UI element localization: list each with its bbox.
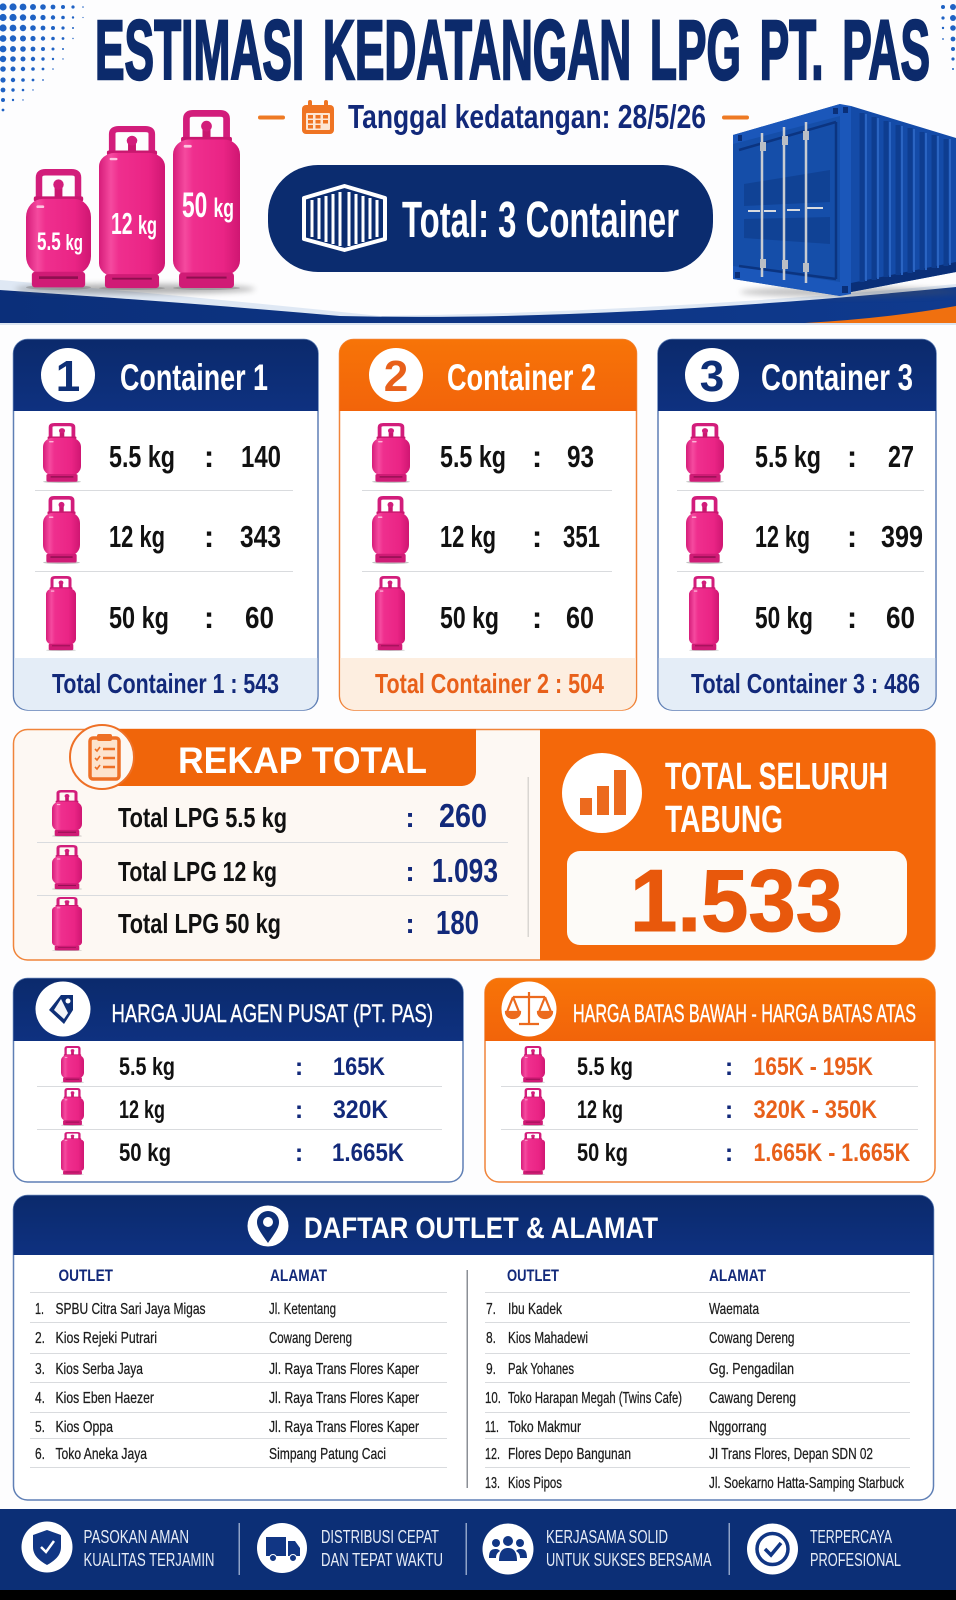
row: 12 kg	[43, 498, 281, 564]
row: 5.5 kg: 5.5 kg	[755, 439, 821, 474]
row: 5.5 kg: 5.5 kg	[440, 439, 506, 474]
row: 50 kg	[689, 577, 915, 651]
row: 5.5 kg	[43, 425, 281, 483]
total container 1: Total Container 1 : 543	[52, 668, 279, 699]
cylinder 12 kg	[99, 129, 165, 290]
row: 5.5 kg: :	[532, 439, 542, 474]
heading: harga batas	[485, 978, 935, 1041]
row: 5.5 kg: 140	[241, 439, 281, 474]
panel: container 2	[340, 340, 636, 710]
row: 5.5 kg: 165K	[333, 1053, 385, 1081]
feature: kerjasama solid: UNTUK SUKSES BERSAMA	[546, 1550, 712, 1570]
row: 12 kg: 12 kg	[440, 519, 496, 554]
table: outlets 7 to 13: 11.	[485, 1419, 499, 1436]
row: 5.5 kg: :	[295, 1053, 303, 1081]
feature: distribusi cepat	[257, 1523, 443, 1573]
row: 50 kg: 60	[566, 600, 594, 635]
row: total lpg 50 kg: Total LPG 50 kg	[118, 908, 281, 939]
heading: harga jual	[14, 978, 463, 1041]
row: 12 kg	[686, 498, 923, 564]
lpg cylinders hero	[15, 113, 255, 294]
row: 12 kg: 351	[563, 519, 600, 554]
total value	[567, 851, 907, 950]
total heading: TABUNG	[665, 799, 783, 841]
table: outlets 1 to 6: Kios Oppa	[56, 1419, 113, 1436]
icon: bar chart	[562, 753, 642, 833]
table: outlets 1 to 6: 6.	[35, 1446, 45, 1463]
table: outlets 7 to 13: 12.	[485, 1446, 500, 1463]
panel: harga batas	[485, 978, 935, 1182]
header: container 2	[340, 340, 636, 411]
cylinder 5.5 kg	[26, 172, 91, 290]
container illustration	[733, 104, 956, 297]
total value: 1.533	[630, 851, 843, 950]
heading: daftar outlet	[14, 1196, 934, 1255]
row: 12 kg: :	[204, 519, 214, 554]
table: outlets 1 to 6: Kios Rejeki Putrari	[56, 1330, 157, 1347]
panel: total seluruh tabung	[540, 729, 935, 960]
table: outlets 7 to 13: 8.	[486, 1330, 496, 1347]
table: outlets 1 to 6: ALAMAT	[270, 1266, 327, 1285]
row: 50 kg: :	[532, 600, 542, 635]
row: 5.5 kg: :	[204, 439, 214, 474]
feature: kerjasama solid	[482, 1524, 712, 1574]
row: 50 kg	[61, 1133, 404, 1175]
feature: pasokan aman: KUALITAS TERJAMIN	[84, 1550, 214, 1570]
feature: terpercaya	[747, 1524, 901, 1574]
feature: pasokan aman	[22, 1522, 214, 1572]
row: 50 kg: 1.665K	[332, 1139, 404, 1167]
row: 12 kg: :	[295, 1096, 303, 1124]
row: 5.5 kg	[521, 1047, 873, 1083]
table: outlets 7 to 13: JI Trans Flores, Depan SDN 02	[709, 1446, 873, 1463]
row: total lpg 5.5 kg: :	[405, 802, 415, 833]
rekap heading	[70, 725, 476, 789]
table: outlets 1 to 6: Jl. Raya Trans Flores Kaper	[269, 1390, 420, 1407]
row: 5.5 kg: 27	[888, 439, 914, 474]
header: container 2: 2	[384, 352, 408, 401]
table: outlets 7 to 13: 10.	[485, 1390, 501, 1407]
panel: container 3	[658, 340, 936, 710]
row: total lpg 50 kg	[52, 898, 479, 951]
row: 50 kg	[375, 577, 594, 651]
table: outlets 7 to 13: Kios Pipos	[508, 1475, 562, 1492]
table: outlets 7 to 13: Flores Depo Bangunan	[508, 1446, 631, 1463]
row: total lpg 12 kg: 1.093	[432, 852, 498, 889]
row: total lpg 5.5 kg	[52, 791, 487, 837]
row: 12 kg: :	[847, 519, 857, 554]
total container pill: Total: 3 Container	[402, 191, 679, 248]
footer band	[0, 1509, 956, 1600]
table: outlets 1 to 6: Kios Eben Haezer	[56, 1390, 155, 1407]
row: 5.5 kg: 165K - 195K	[754, 1053, 873, 1081]
table: outlets 1 to 6: Jl. Ketentang	[269, 1301, 336, 1318]
table: outlets 7 to 13: Toko Makmur	[508, 1419, 582, 1436]
row: 50 kg: 1.665K - 1.665K	[754, 1139, 910, 1167]
feature: terpercaya: TERPERCAYA	[810, 1527, 892, 1547]
table: outlets 1 to 6: 2.	[35, 1330, 45, 1347]
feature: distribusi cepat: DAN TEPAT WAKTU	[321, 1550, 443, 1570]
panel: harga jual agen pusat	[14, 978, 463, 1182]
table: outlets 1 to 6: OUTLET	[58, 1266, 113, 1285]
table: outlets 1 to 6: Toko Aneka Jaya	[56, 1446, 147, 1463]
table: outlets 1 to 6: 4.	[35, 1390, 45, 1407]
header: container 3: 3	[700, 352, 724, 401]
icon: clipboard	[90, 734, 119, 779]
cylinder 50 kg: 50 kg	[182, 186, 234, 225]
row: 5.5 kg: :	[725, 1053, 733, 1081]
header swoosh	[0, 280, 956, 325]
row: total lpg 12 kg: :	[405, 856, 415, 887]
row: 12 kg	[521, 1089, 877, 1126]
cylinder 50 kg	[173, 113, 240, 290]
row: 5.5 kg: 5.5 kg	[119, 1053, 175, 1081]
row: 12 kg: 12 kg	[119, 1096, 165, 1124]
row: 5.5 kg: 5.5 kg	[109, 439, 175, 474]
table: outlets 7 to 13: 9.	[486, 1361, 496, 1378]
rekap heading: REKAP TOTAL	[178, 740, 427, 781]
feature: terpercaya: PROFESIONAL	[810, 1550, 901, 1570]
row: 50 kg: :	[204, 600, 214, 635]
feature: distribusi cepat: DISTRIBUSI CEPAT	[321, 1527, 439, 1547]
halftone dots top left	[0, 3, 84, 111]
total container 2: Total Container 2 : 504	[375, 668, 604, 699]
table: outlets 1 to 6: Cowang Dereng	[269, 1330, 352, 1347]
row: 12 kg: 12 kg	[577, 1096, 623, 1124]
row: 5.5 kg	[686, 425, 914, 483]
table: outlets 7 to 13: Nggorrang	[709, 1419, 766, 1436]
table: outlets 7 to 13: Waemata	[709, 1301, 759, 1318]
cylinder 5.5 kg: 5.5 kg	[37, 228, 83, 256]
row: 12 kg	[61, 1089, 388, 1126]
row: total lpg 5.5 kg: 260	[439, 797, 487, 834]
row: total lpg 50 kg: 180	[436, 904, 479, 941]
row: 5.5 kg	[372, 425, 594, 483]
table: outlets 1 to 6: SPBU Citra Sari Jaya Migas	[56, 1301, 206, 1318]
cylinder 12 kg: 12 kg	[111, 206, 157, 241]
row: 12 kg: :	[532, 519, 542, 554]
row: 12 kg	[372, 498, 600, 564]
row: 12 kg: :	[725, 1096, 733, 1124]
row: 50 kg: :	[295, 1139, 303, 1167]
table: outlets 1 to 6	[35, 1266, 420, 1463]
panel: container 1	[14, 340, 318, 710]
row: 50 kg: :	[847, 600, 857, 635]
row: 5.5 kg: :	[847, 439, 857, 474]
row: 12 kg: 399	[881, 519, 923, 554]
row: 50 kg	[46, 577, 274, 651]
table: outlets 1 to 6: Simpang Patung Caci	[269, 1446, 386, 1463]
row: 50 kg: :	[725, 1139, 733, 1167]
header: container 1: 1	[56, 352, 80, 401]
row: 5.5 kg	[61, 1047, 385, 1083]
table: outlets 1 to 6: 3.	[35, 1361, 45, 1378]
header: container 2: Container 2	[447, 357, 596, 398]
row: 50 kg: 60	[245, 600, 274, 635]
total container 2	[340, 658, 636, 710]
row: 50 kg: 50 kg	[119, 1139, 171, 1167]
row: 50 kg: 50 kg	[109, 600, 169, 635]
total container 1	[14, 658, 317, 710]
row: 50 kg	[521, 1133, 910, 1175]
row: 12 kg: 12 kg	[109, 519, 165, 554]
row: total lpg 50 kg: :	[405, 908, 415, 939]
row: 12 kg: 343	[240, 519, 281, 554]
table: outlets 7 to 13: Cowang Dereng	[709, 1330, 794, 1347]
table: outlets 7 to 13: Kios Mahadewi	[508, 1330, 588, 1347]
table: outlets 7 to 13	[485, 1266, 905, 1492]
feature: kerjasama solid: KERJASAMA SOLID	[546, 1527, 668, 1547]
table: outlets 1 to 6: Jl. Raya Trans Flores Kaper	[269, 1361, 420, 1378]
feature: pasokan aman: PASOKAN AMAN	[84, 1527, 189, 1547]
table: outlets 1 to 6: 1.	[35, 1301, 44, 1318]
header: container 1: Container 1	[120, 357, 268, 398]
header: container 3	[658, 340, 936, 411]
row: 5.5 kg: 5.5 kg	[577, 1053, 633, 1081]
heading: harga jual: HARGA JUAL AGEN PUSAT (PT. PAS)	[112, 1000, 433, 1028]
total container pill	[268, 165, 713, 272]
icon: calendar	[302, 100, 334, 134]
table: outlets 1 to 6: 5.	[35, 1419, 45, 1436]
halftone dots top right	[941, 4, 956, 70]
table: outlets 7 to 13: Gg. Pengadilan	[709, 1361, 794, 1378]
row: total lpg 5.5 kg: Total LPG 5.5 kg	[118, 802, 287, 833]
row: total lpg 12 kg	[52, 846, 498, 890]
row: 50 kg: 50 kg	[755, 600, 813, 635]
table: outlets 1 to 6: Kios Serba Jaya	[56, 1361, 143, 1378]
table: outlets 7 to 13: Pak Yohanes	[508, 1361, 574, 1378]
row: total lpg 12 kg: Total LPG 12 kg	[118, 856, 277, 887]
row: 50 kg: 50 kg	[577, 1139, 628, 1167]
total heading	[665, 756, 888, 841]
row: 50 kg: 50 kg	[440, 600, 499, 635]
table: outlets 7 to 13: ALAMAT	[709, 1266, 766, 1285]
header: container 1	[14, 340, 318, 411]
row: 5.5 kg: 93	[567, 439, 594, 474]
table: outlets 1 to 6: Jl. Raya Trans Flores Kaper	[269, 1419, 420, 1436]
table: outlets 7 to 13: 13.	[485, 1475, 500, 1492]
table: outlets 7 to 13: Ibu Kadek	[508, 1301, 563, 1318]
heading: daftar outlet: DAFTAR OUTLET & ALAMAT	[304, 1212, 658, 1245]
table: outlets 7 to 13: Cawang Dereng	[709, 1390, 796, 1407]
table: outlets 7 to 13: Toko Harapan Megah (Twins Cafe)	[508, 1390, 682, 1407]
row: 12 kg: 320K - 350K	[754, 1096, 877, 1124]
row: 12 kg: 320K	[333, 1096, 388, 1124]
panel: rekap total	[14, 725, 935, 960]
row: 12 kg: 12 kg	[755, 519, 810, 554]
total container 3	[659, 658, 935, 710]
row: 50 kg: 60	[886, 600, 915, 635]
icon: container	[304, 186, 385, 250]
date line: Tanggal kedatangan: 28/5/26	[348, 98, 706, 135]
table: outlets 7 to 13: OUTLET	[507, 1266, 559, 1285]
panel: daftar outlet	[14, 1196, 934, 1500]
table: outlets 7 to 13: 7.	[486, 1301, 496, 1318]
